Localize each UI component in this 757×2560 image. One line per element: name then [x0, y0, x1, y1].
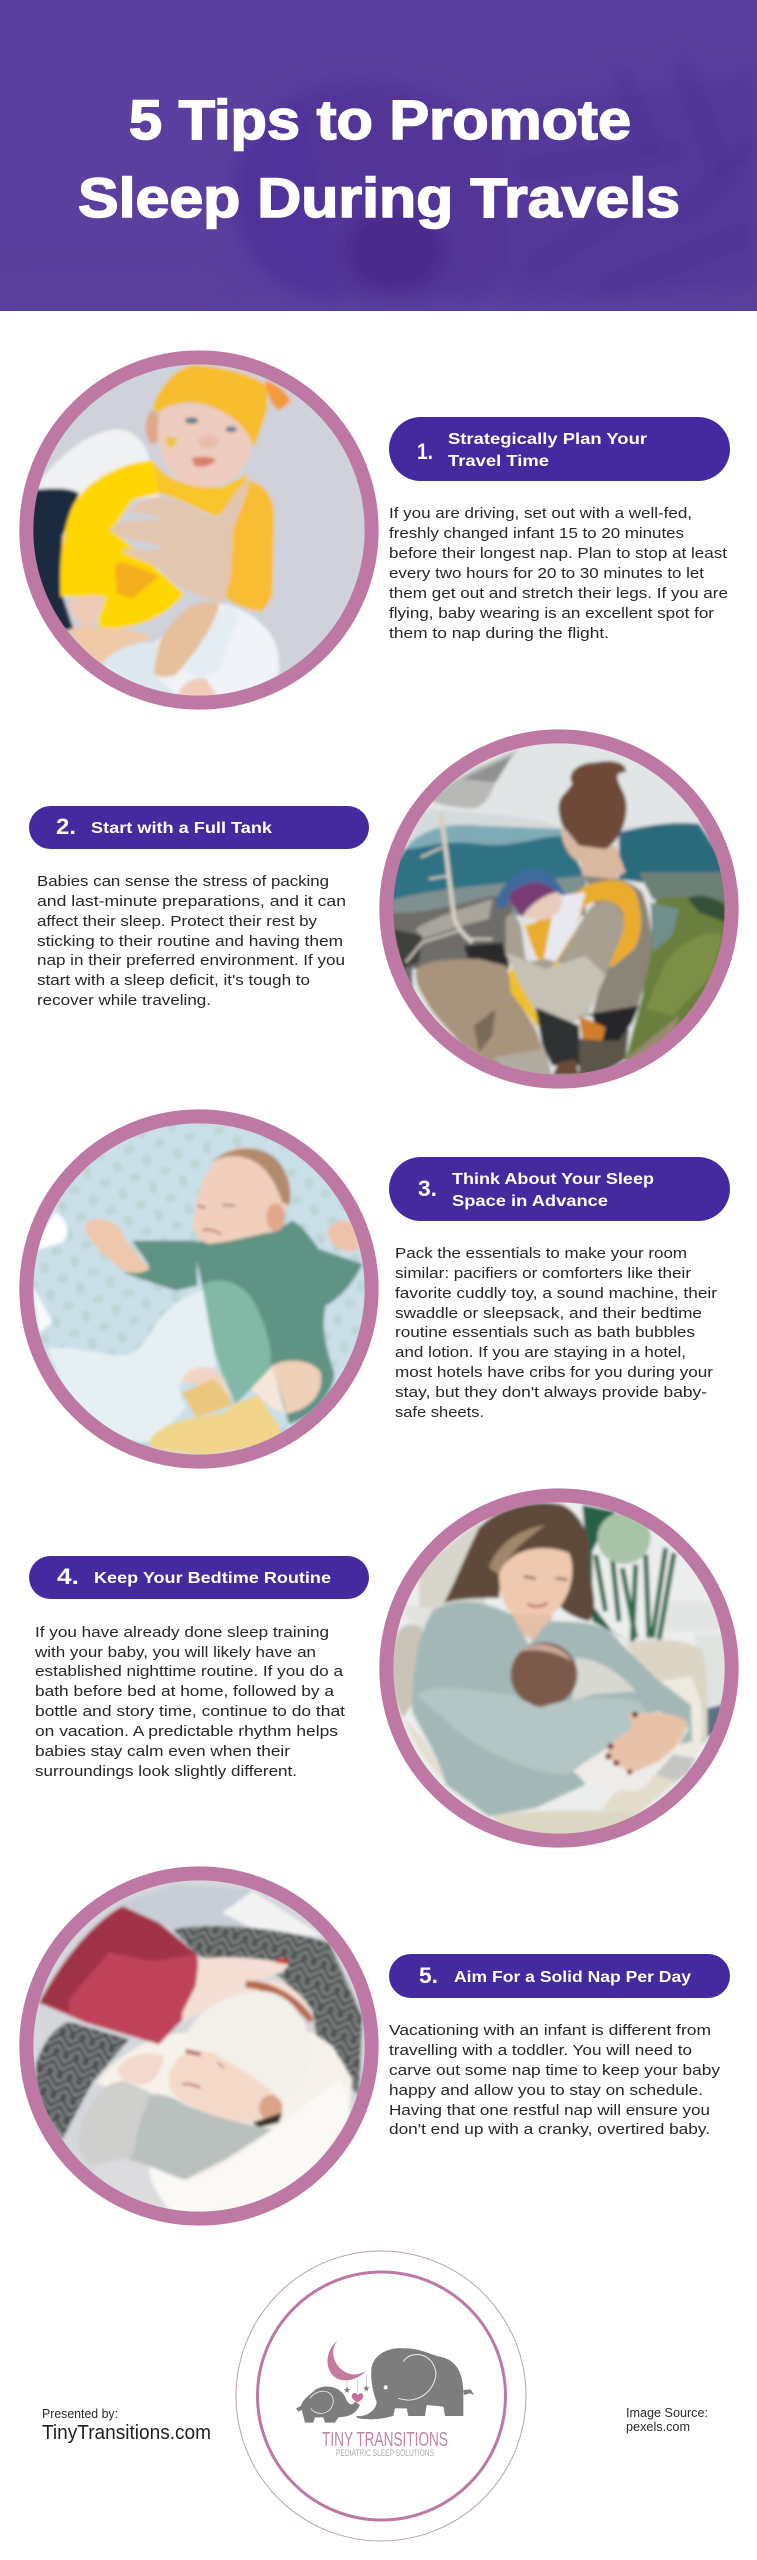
background image: faded sleeping baby	[234, 73, 754, 296]
ring	[386, 736, 732, 1082]
heading pill: 3.	[418, 1176, 437, 1201]
panel: tip 1	[19, 350, 730, 710]
body text: Having that one restful nap will ensure you	[389, 2102, 710, 2119]
body text: established nighttime routine. If you do a	[35, 1663, 344, 1680]
body text: bottle and story time, continue to do that	[35, 1703, 346, 1720]
photo: mother cradling newborn on sofa	[379, 1488, 739, 1848]
ring	[386, 1495, 732, 1841]
body text	[395, 1245, 717, 1421]
heading pill: 1.	[417, 439, 433, 464]
body text: If you have already done sleep training	[35, 1624, 329, 1641]
title: Sleep During Travels	[78, 166, 680, 229]
title: 5 Tips to Promote	[129, 88, 631, 151]
body text: with your baby, you will likely have an	[34, 1644, 316, 1661]
image source: Image Source:	[626, 2405, 708, 2420]
body text: surroundings look slightly different.	[35, 1763, 297, 1780]
heading pill: 5.	[419, 1963, 438, 1988]
body text: don't end up with a cranky, overtired baby.	[389, 2121, 710, 2138]
body text: favorite cuddly toy, a sound machine, their	[395, 1285, 717, 1302]
panel: tip 2	[29, 729, 739, 1089]
body text: travelling with a toddler. You will need to	[389, 2042, 692, 2059]
body text: nap in their preferred environment. If you	[37, 952, 345, 969]
photo: newborn sleeping in green onesie	[19, 1109, 379, 1469]
heading pill	[389, 1157, 730, 1221]
heading pill	[389, 1954, 730, 1998]
body text: routine essentials such as bath bubbles	[395, 1324, 695, 1341]
heading pill	[29, 806, 369, 849]
image source	[626, 2405, 708, 2434]
presented by: Presented by:	[42, 2406, 118, 2421]
heading pill: Think About Your Sleep	[452, 1171, 654, 1188]
body text: happy and allow you to stay on schedule.	[389, 2082, 703, 2099]
presented by: TinyTransitions.com	[42, 2422, 211, 2444]
photo: mother carrying baby on mountain top	[379, 729, 739, 1089]
body text: If you are driving, set out with a well-fed,	[389, 505, 692, 522]
body text: babies stay calm even when their	[35, 1743, 290, 1760]
title	[78, 88, 680, 229]
header banner	[0, 0, 757, 315]
heading pill: Aim For a Solid Nap Per Day	[454, 1969, 691, 1986]
heading pill: 2.	[56, 814, 76, 839]
body text: affect their sleep. Protect their rest by	[37, 913, 318, 930]
body text: Pack the essentials to make your room	[395, 1245, 687, 1262]
image source: pexels.com	[626, 2419, 690, 2434]
heading pill: Start with a Full Tank	[91, 820, 272, 837]
body text: start with a sleep deficit, it's tough to	[37, 972, 310, 989]
body text: and last-minute preparations, and it can	[37, 893, 346, 910]
body text: stay, but they don't always provide baby-	[395, 1384, 707, 1401]
ring	[26, 1116, 372, 1462]
heading pill	[389, 417, 730, 481]
heading pill: Space in Advance	[452, 1193, 608, 1210]
body text: sticking to their routine and having them	[37, 933, 343, 950]
body text: before their longest nap. Plan to stop at least	[389, 545, 728, 562]
icon: elephants and moon	[296, 2340, 474, 2423]
body text: on vacation. A predictable rhythm helps	[35, 1723, 338, 1740]
body text: and lotion. If you are staying in a hotel,	[395, 1344, 686, 1361]
body text: flying, baby wearing is an excellent spot for	[389, 605, 714, 622]
heading pill: Travel Time	[448, 453, 549, 470]
panel: tip 3	[19, 1109, 730, 1469]
body text	[34, 1624, 346, 1780]
heading pill: 4.	[57, 1564, 79, 1589]
body text	[389, 2022, 721, 2138]
body text	[389, 505, 728, 642]
body text: them get out and stretch their legs. If you are	[389, 585, 728, 602]
body text: carve out some nap time to keep your baby	[389, 2062, 721, 2079]
body text: freshly changed infant 15 to 20 minutes	[389, 525, 684, 542]
body text: them to nap during the flight.	[389, 625, 609, 642]
logo wordmark: TINY TRANSITIONS	[322, 2429, 448, 2451]
photo: baby in yellow sweater and hat	[19, 350, 379, 710]
body text: recover while traveling.	[37, 992, 211, 1009]
body text: similar: pacifiers or comforters like their	[395, 1265, 691, 1282]
body text: bath before bed at home, followed by a	[35, 1683, 335, 1700]
logo tagline: PEDIATRIC SLEEP SOLUTIONS	[336, 2448, 434, 2459]
heading pill: Strategically Plan Your	[448, 431, 647, 448]
heading pill	[29, 1556, 369, 1599]
panel: tip 4	[29, 1488, 739, 1848]
body text: swaddle or sleepsack, and their bedtime	[395, 1305, 702, 1322]
presented by	[42, 2406, 211, 2444]
body text: Babies can sense the stress of packing	[37, 873, 329, 890]
photo: hand on sleeping baby's white hat	[19, 1866, 379, 2226]
body text	[37, 873, 346, 1009]
ring	[26, 357, 372, 703]
body text: safe sheets.	[395, 1404, 484, 1421]
logo badge	[236, 2251, 526, 2541]
body text: every two hours for 20 to 30 minutes to let	[389, 565, 705, 582]
ring	[26, 1873, 372, 2219]
body text: most hotels have cribs for you during your	[395, 1364, 713, 1381]
panel: tip 5	[19, 1866, 730, 2226]
footer	[42, 2251, 708, 2541]
body text: Vacationing with an infant is different from	[389, 2022, 711, 2039]
heading pill: Keep Your Bedtime Routine	[94, 1570, 331, 1587]
